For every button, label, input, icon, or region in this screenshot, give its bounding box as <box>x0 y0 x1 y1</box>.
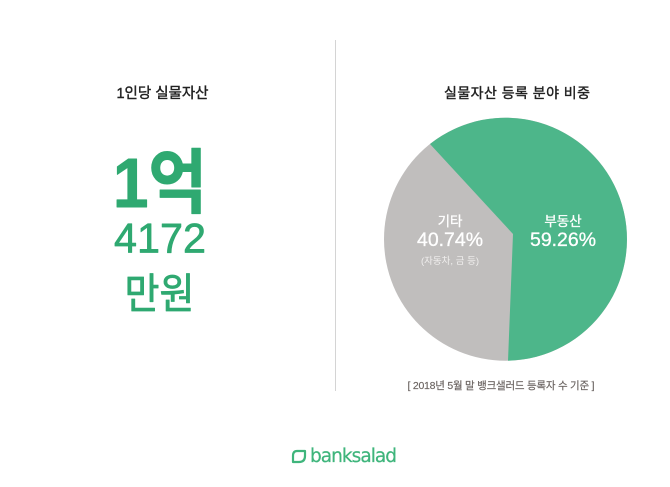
logo: banksalad <box>293 446 397 467</box>
label: other: (자동차, 금 등) <box>421 255 479 267</box>
figure: 만원: 만원 <box>124 270 194 318</box>
label: other <box>417 214 483 267</box>
icon: leaf <box>293 451 305 462</box>
label: other: 40.74% <box>417 230 483 251</box>
label: real estate <box>530 214 596 251</box>
label: real estate: 59.26% <box>530 230 596 251</box>
label: other: 기타 <box>438 214 463 229</box>
figure: 1억: 1억 <box>113 144 207 222</box>
footnote: [ 2018년 5월 말 뱅크샐러드 등록자 수 기준 ] <box>408 380 595 392</box>
slice: real estate 59.26% <box>430 118 627 361</box>
heading: share by registered asset type: 실물자산 등록 분야 비중 <box>444 85 590 101</box>
pie chart <box>384 118 627 361</box>
figure: 4172: 4172 <box>114 214 206 262</box>
slice: other 40.74% <box>384 118 627 361</box>
big figure: 1억 4172 만원 <box>113 144 207 318</box>
heading: per-capita physical assets: 1인당 실물자산 <box>116 85 208 102</box>
wordmark: banksalad <box>310 446 397 467</box>
label: real estate: 부동산 <box>544 214 582 229</box>
